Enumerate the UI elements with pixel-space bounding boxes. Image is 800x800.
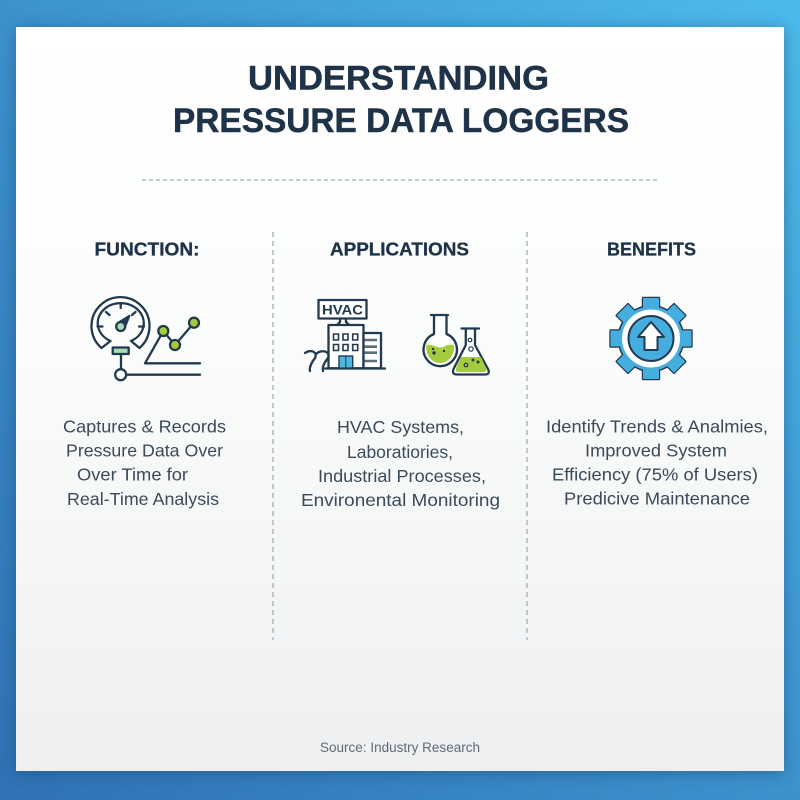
icon: HVAC building [305, 300, 385, 371]
title [173, 60, 629, 140]
icon: pressure gauge and trend chart [92, 297, 200, 380]
text: applications list: HVAC Systems, [337, 417, 464, 437]
icon: gear with up arrow [610, 298, 692, 379]
icon: HVAC building: HVAC [322, 302, 363, 318]
heading: applications: APPLICATIONS [330, 238, 469, 260]
icon: lab flasks [424, 315, 489, 374]
title: UNDERSTANDING [248, 60, 549, 98]
text: applications list: Laboratiories, [347, 442, 453, 462]
text: benefits list [546, 416, 768, 508]
text: applications list: Industrial Processes, [318, 466, 486, 486]
text: function description: Real-Time Analysis [67, 489, 219, 509]
text: benefits list: Identify Trends & Analmies, [546, 416, 768, 436]
text: benefits list: Improved System [585, 441, 727, 461]
panel: function [63, 238, 226, 509]
text: benefits list: Predicive Maintenance [564, 488, 750, 508]
text: function description: Over Time for [77, 465, 188, 485]
text: function description [63, 416, 226, 509]
text: function description: Pressure Data Over [66, 441, 223, 461]
text: function description: Captures & Records [63, 416, 226, 436]
heading: function: FUNCTION: [94, 238, 200, 260]
panel: benefits [546, 238, 768, 508]
text: benefits list: Efficiency (75% of Users) [552, 465, 758, 485]
text: applications list: Environental Monitoring [301, 490, 500, 510]
title: PRESSURE DATA LOGGERS [173, 102, 629, 140]
heading: benefits: BENEFITS [607, 238, 696, 260]
panel: applications [301, 238, 500, 510]
text: applications list [301, 417, 500, 510]
source note: Source: Industry Research [320, 740, 480, 755]
